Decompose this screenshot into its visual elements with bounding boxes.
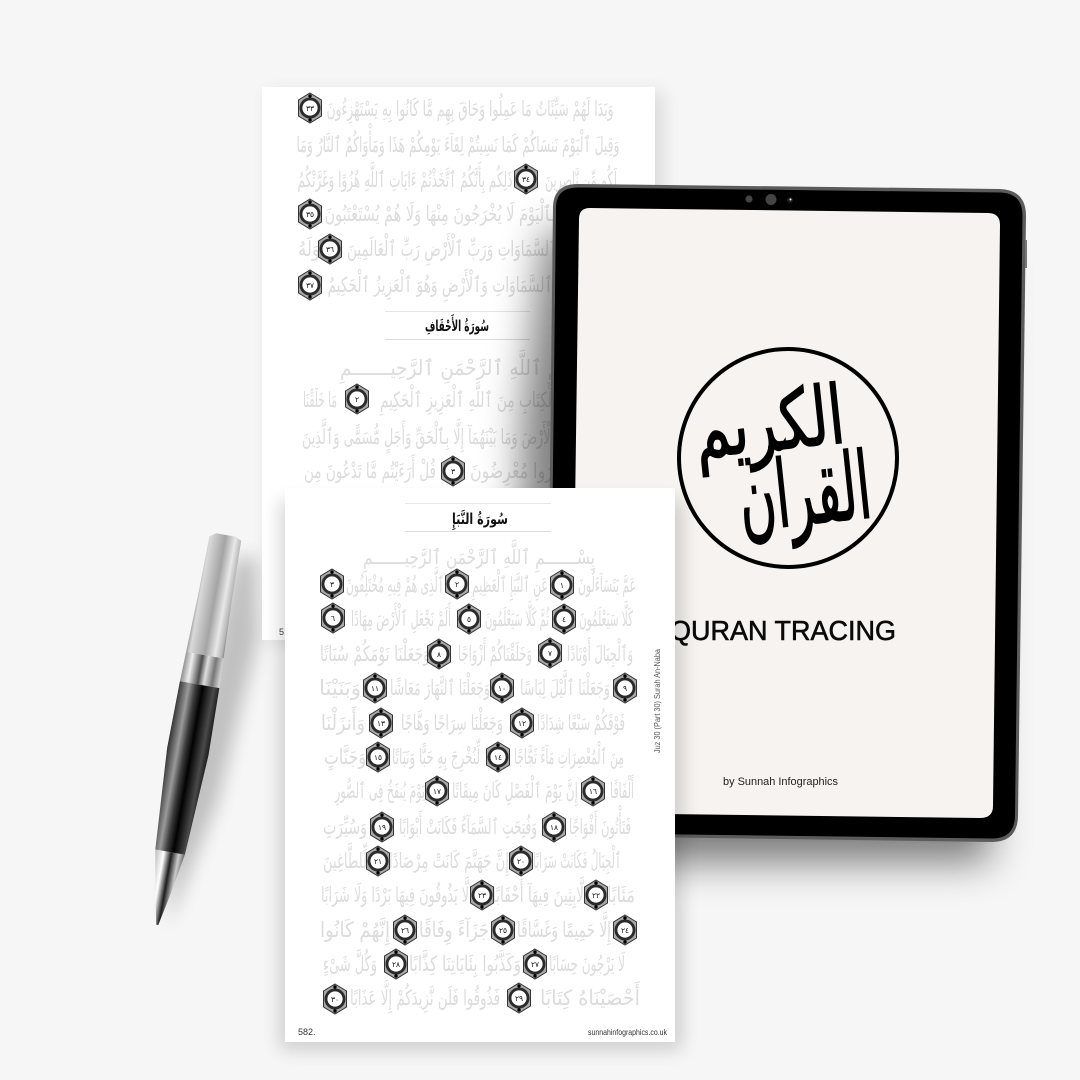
front page verse markers: ١ xyxy=(560,581,564,590)
back page shadow xyxy=(268,92,664,644)
calligraphy emblem: القرآن xyxy=(733,429,876,554)
front page verse markers: ٣٠ xyxy=(331,995,339,1004)
pen band xyxy=(180,652,225,688)
back page verse text: ذَلِكُم بِأَنَّكُمُ ٱتَّخَذْتُمْ ءَايَاتِ ٱللَّهِ هُزُوًا وَغَرَّتْكُمُ xyxy=(298,160,512,194)
front page xyxy=(285,488,675,1042)
front page verse text: وَجَعَلْنَا سِرَاجًا وَهَّاجًا xyxy=(401,706,503,735)
basmala: بِسْـــــــمِ ٱللَّهِ ٱلرَّحْمَنِ ٱلرَّحِيـــــــمِ xyxy=(362,539,595,573)
calligraphy emblem xyxy=(679,349,897,567)
front page verse text: مَئَابًا xyxy=(607,883,635,907)
front page verse text: أَلْفَافًا xyxy=(610,774,634,803)
title: QURAN TRACING xyxy=(670,615,896,646)
back page verse markers: ٣٤ xyxy=(522,175,530,184)
front page verse text xyxy=(319,565,641,1014)
front page verse markers: ٦ xyxy=(331,614,335,623)
back page verse markers xyxy=(298,93,538,486)
back page xyxy=(262,87,655,640)
back page verse text: ٱلْأَرْضَ وَمَا بَيْنَهُمَآ إِلَّا بِٱلْحَقِّ وَأَجَلٍ مُّسَمًّى وَٱلَّذِينَ xyxy=(302,417,558,455)
pen barrel xyxy=(149,681,220,856)
front page verse markers xyxy=(320,569,636,1014)
surah heading: An-Naba: سُورَةُ النَّبَإِ xyxy=(452,509,508,531)
front page verse text: فَتَأْتُونَ أَفْوَاجًا xyxy=(569,805,631,839)
back page verse text: وَقِيلَ ٱلْيَوْمَ نَنسَاكُمْ كَمَا نَسِيتُمْ لِقَآءَ يَوْمِكُمْ هَذَا وَمَأْوَاكُمُ ٱلنَّارُ وَمَا xyxy=(296,123,620,158)
front page verse markers: ٢٥ xyxy=(499,926,507,935)
front page verse markers: ١٤ xyxy=(494,753,502,762)
tablet xyxy=(546,184,1027,842)
front page verse markers: ١٠ xyxy=(498,684,506,693)
front page verse text: كَلَّا سَيَعْلَمُونَ xyxy=(579,599,633,631)
tablet screen xyxy=(571,208,1000,818)
front page verse markers: ٧ xyxy=(548,649,552,658)
front page verse markers: ٢٩ xyxy=(515,994,523,1003)
front page verse text: وَجَنَّاتٍ xyxy=(324,744,366,772)
front page verse text: جَزَآءً وِفَاقًا xyxy=(419,917,489,945)
back page verse text: قُلْ أَرَءَيْتُم مَّا تَدْعُونَ مِن xyxy=(304,454,436,484)
front page verse text: لَّا يَذُوقُونَ فِيهَا بَرْدًا وَلَا شَرَابًا xyxy=(321,875,469,907)
front page verse text: إِنَّ جَهَنَّمَ كَانَتْ مِرْصَادًا xyxy=(389,848,510,877)
pen xyxy=(137,531,258,929)
front page verse text: وَفُتِحَتِ ٱلسَّمَآءُ فَكَانَتْ أَبْوَابًا xyxy=(399,810,537,839)
front page verse markers: ٢٤ xyxy=(621,926,629,935)
front page verse markers: ٢٨ xyxy=(392,960,400,969)
front page shadow xyxy=(280,500,682,1050)
back page verse markers: ٣٣ xyxy=(306,104,314,113)
back page verse text: ٱلسَّمَاوَاتِ وَٱلْأَرْضِ وَهُوَ ٱلْعَزِيزُ ٱلْحَكِيمُ xyxy=(328,268,552,302)
front page verse markers: ١٥ xyxy=(374,753,382,762)
surah heading: Al-Ahqaf: سُورَةُ الأَحْقَافِ xyxy=(425,314,489,335)
page number: 582. xyxy=(298,1027,316,1037)
front page verse markers: ٣ xyxy=(330,580,334,589)
back page verse markers: ٣٧ xyxy=(306,281,314,290)
front page verse text: إِنَّ يَوْمَ ٱلْفَصْلِ كَانَ مِيقَاتًا xyxy=(452,774,578,807)
front page verse markers: ١٣ xyxy=(377,719,385,728)
byline: by Sunnah Infographics xyxy=(723,776,838,788)
back page verse text: بِسْـــــــمِ ٱللَّهِ ٱلرَّحْمَنِ ٱلرَّحِيـــــــمِ xyxy=(339,348,621,384)
front page verse text: أَحْصَيْنَاهُ كِتَابًا xyxy=(540,981,641,1010)
front page verse text: إِلَّا حَمِيمًا وَغَسَّاقًا xyxy=(517,910,612,946)
front page verse markers: ١٨ xyxy=(550,823,558,832)
front page verse text: لِّلطَّاغِينَ xyxy=(323,841,368,873)
front page verse markers: ٢ xyxy=(455,580,459,589)
front page verse text: وَٱلْجِبَالَ أَوْتَادًا xyxy=(567,637,633,668)
front page verse text: ٱلْجِبَالُ فَكَانَتْ سَرَابًا xyxy=(533,844,621,875)
front page verse text: يَوْمَ يُنفَخُ فِى ٱلصُّورِ xyxy=(334,777,426,806)
front page verse text: ثُمَّ كَلَّا سَيَعْلَمُونَ xyxy=(485,599,549,632)
vertical running title: Juz 30 (Part 30) Surah An-Naba xyxy=(652,649,662,753)
back page verse markers: ٣٦ xyxy=(326,245,334,254)
front page verse text: عَنِ ٱلنَّبَإِ ٱلْعَظِيمِ xyxy=(472,568,548,601)
tablet frame xyxy=(546,184,1026,842)
back page verse text: أُنذِرُوا مُعْرِضُونَ xyxy=(470,450,571,486)
back page verse markers: ٢ xyxy=(355,395,359,404)
front page verse markers: ٢٢ xyxy=(592,891,600,900)
back page verse text: ٱلْكِتَابِ مِنَ ٱللَّهِ ٱلْعَزِيزِ ٱلْحَكِيمِ xyxy=(379,380,560,416)
front page verse markers: ٢١ xyxy=(374,857,382,866)
front page verse markers: ٩ xyxy=(623,684,627,693)
front page verse text: وَخَلَقْنَاكُمْ أَزْوَاجًا xyxy=(458,637,532,667)
back page verse text: وَلَهُ xyxy=(298,236,320,261)
front page verse markers: ١٧ xyxy=(433,787,441,796)
front page verse text: ٱلَّذِى هُمْ فِيهِ مُخْتَلِفُونَ xyxy=(346,565,444,598)
pen cap xyxy=(186,532,245,658)
tablet cameras xyxy=(745,194,793,205)
front page verse text: لِّنُخْرِجَ بِهِ حَبًّا وَنَبَاتًا xyxy=(392,737,480,772)
front page verse markers: ١٩ xyxy=(378,823,386,832)
front page verse markers: ٢٠ xyxy=(517,857,525,866)
back page verse markers: ٣ xyxy=(451,467,455,476)
front page verse text: وَسُيِّرَتِ xyxy=(323,814,367,839)
tablet shadow xyxy=(518,230,990,862)
pen tip xyxy=(142,850,185,928)
back page verse text: وَبَدَا لَهُمْ سَيِّئَاتُ مَا عَمِلُوا وَحَاقَ بِهِم مَّا كَانُوا بِهِ يَسْتَهْزِءُونَ xyxy=(326,92,614,125)
front page verse text: وَجَعَلْنَا نَوْمَكُمْ سُبَاتًا xyxy=(320,637,430,667)
front page verse markers: ٤ xyxy=(562,615,566,624)
front page verse text: وَجَعَلْنَا ٱلنَّهَارَ مَعَاشًا xyxy=(390,671,490,700)
front page verse text: فَوْقَكُمْ سَبْعًا شِدَادًا xyxy=(537,707,625,736)
front page verse markers: ١٦ xyxy=(589,787,597,796)
front page verse text: فَذُوقُوا فَلَن نَّزِيدَكُمْ إِلَّا عَذَابًا xyxy=(350,978,500,1014)
front page verse text: وَكُلَّ شَىْءٍ xyxy=(323,948,377,977)
front page verse markers: ٨ xyxy=(437,650,441,659)
front page verse text: أَلَمْ نَجْعَلِ ٱلْأَرْضَ مِهَادًا xyxy=(351,602,451,634)
front page verse text: وَجَعَلْنَا ٱلَّيْلَ لِبَاسًا xyxy=(520,668,610,700)
back page verse text xyxy=(296,92,621,486)
back page verse text: لَكُم مِّن نَّاصِرِينَ xyxy=(545,164,617,195)
back page verse markers: ٣٥ xyxy=(306,210,314,219)
front page verse text: إِنَّهُمْ كَانُوا xyxy=(320,917,391,946)
front page verse markers: ٥ xyxy=(467,615,471,624)
front page verse text: لَا يَرْجُونَ حِسَابًا xyxy=(549,951,625,976)
front page verse markers: ٢٣ xyxy=(478,891,486,900)
front page verse text: مِنَ ٱلْمُعْصِرَاتِ مَآءً ثَجَّاجًا xyxy=(514,740,624,769)
back page verse text: فَٱلْيَوْمَ لَا يُخْرَجُونَ مِنْهَا وَلَا هُمْ يُسْتَعْتَبُونَ xyxy=(324,197,560,227)
front page verse markers: ١٢ xyxy=(518,719,526,728)
front page verse text: وَكَذَّبُوا بِئَايَاتِنَا كِذَّابًا xyxy=(409,948,521,978)
back page number fragment: 5 xyxy=(279,627,284,637)
back page verse text: مَا خَلَقْنَا xyxy=(303,387,337,412)
front page verse text: وَبَنَيْنَا xyxy=(319,676,361,700)
front page verse markers: ٢٧ xyxy=(531,960,539,969)
front page verse text: لَّابِثِينَ فِيهَآ أَحْقَابًا xyxy=(492,875,584,909)
front page verse markers: ١١ xyxy=(371,684,379,693)
front page verse text: عَمَّ يَتَسَآءَلُونَ xyxy=(578,568,636,598)
back page verse text: ٱلسَّمَاوَاتِ وَرَبِّ ٱلْأَرْضِ رَبِّ ٱلْعَالَمِينَ xyxy=(347,232,557,266)
side buttons xyxy=(1025,240,1027,268)
front page verse text: وَأَنزَلْنَا xyxy=(321,706,365,735)
front page verse markers: ٢٦ xyxy=(401,926,409,935)
website: sunnahinfographics.co.uk xyxy=(588,1027,668,1037)
calligraphy emblem: الكريم xyxy=(690,368,849,478)
